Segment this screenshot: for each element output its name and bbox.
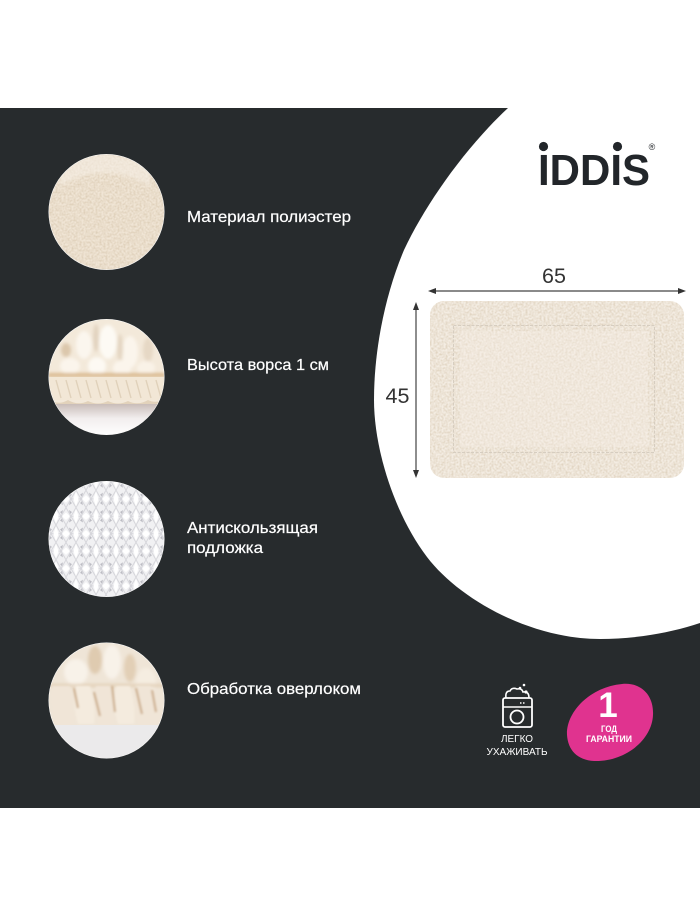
warranty text: ГОД <box>601 724 617 735</box>
feature text: anti-slip backing: подложка <box>187 540 263 557</box>
photo: anti-slip backing <box>48 481 165 598</box>
warranty badge <box>567 684 653 761</box>
warranty number: 1 <box>598 686 618 725</box>
feature text: anti-slip backing: Антискользящая <box>187 520 318 537</box>
white curved area <box>374 108 700 639</box>
care label <box>486 733 548 758</box>
care label: УХАЖИВАТЬ <box>486 746 548 758</box>
icon: washing machine <box>503 684 532 727</box>
warranty text <box>586 724 632 745</box>
photo: material texture <box>48 154 165 271</box>
height label: 45 <box>386 384 409 408</box>
height dimension arrow <box>413 302 419 478</box>
dark background panel <box>0 108 700 808</box>
width dimension arrow <box>428 288 686 294</box>
care label: ЛЕГКО <box>501 733 533 745</box>
product image: bath mat <box>430 301 684 478</box>
warranty text: ГАРАНТИИ <box>586 734 632 745</box>
photo: overlock edge <box>48 642 165 759</box>
feature text: material: Материал полиэстер <box>187 209 351 226</box>
feature text: pile height: Высота ворса 1 см <box>187 357 329 374</box>
width label: 65 <box>542 264 566 288</box>
feature text: anti-slip backing <box>187 520 318 557</box>
logo: IDDIS: IDDIS <box>538 146 650 195</box>
photo: pile height <box>48 319 165 436</box>
feature text: overlock edge: Обработка оверлоком <box>187 681 361 698</box>
logo: IDDIS: ® <box>649 142 656 152</box>
